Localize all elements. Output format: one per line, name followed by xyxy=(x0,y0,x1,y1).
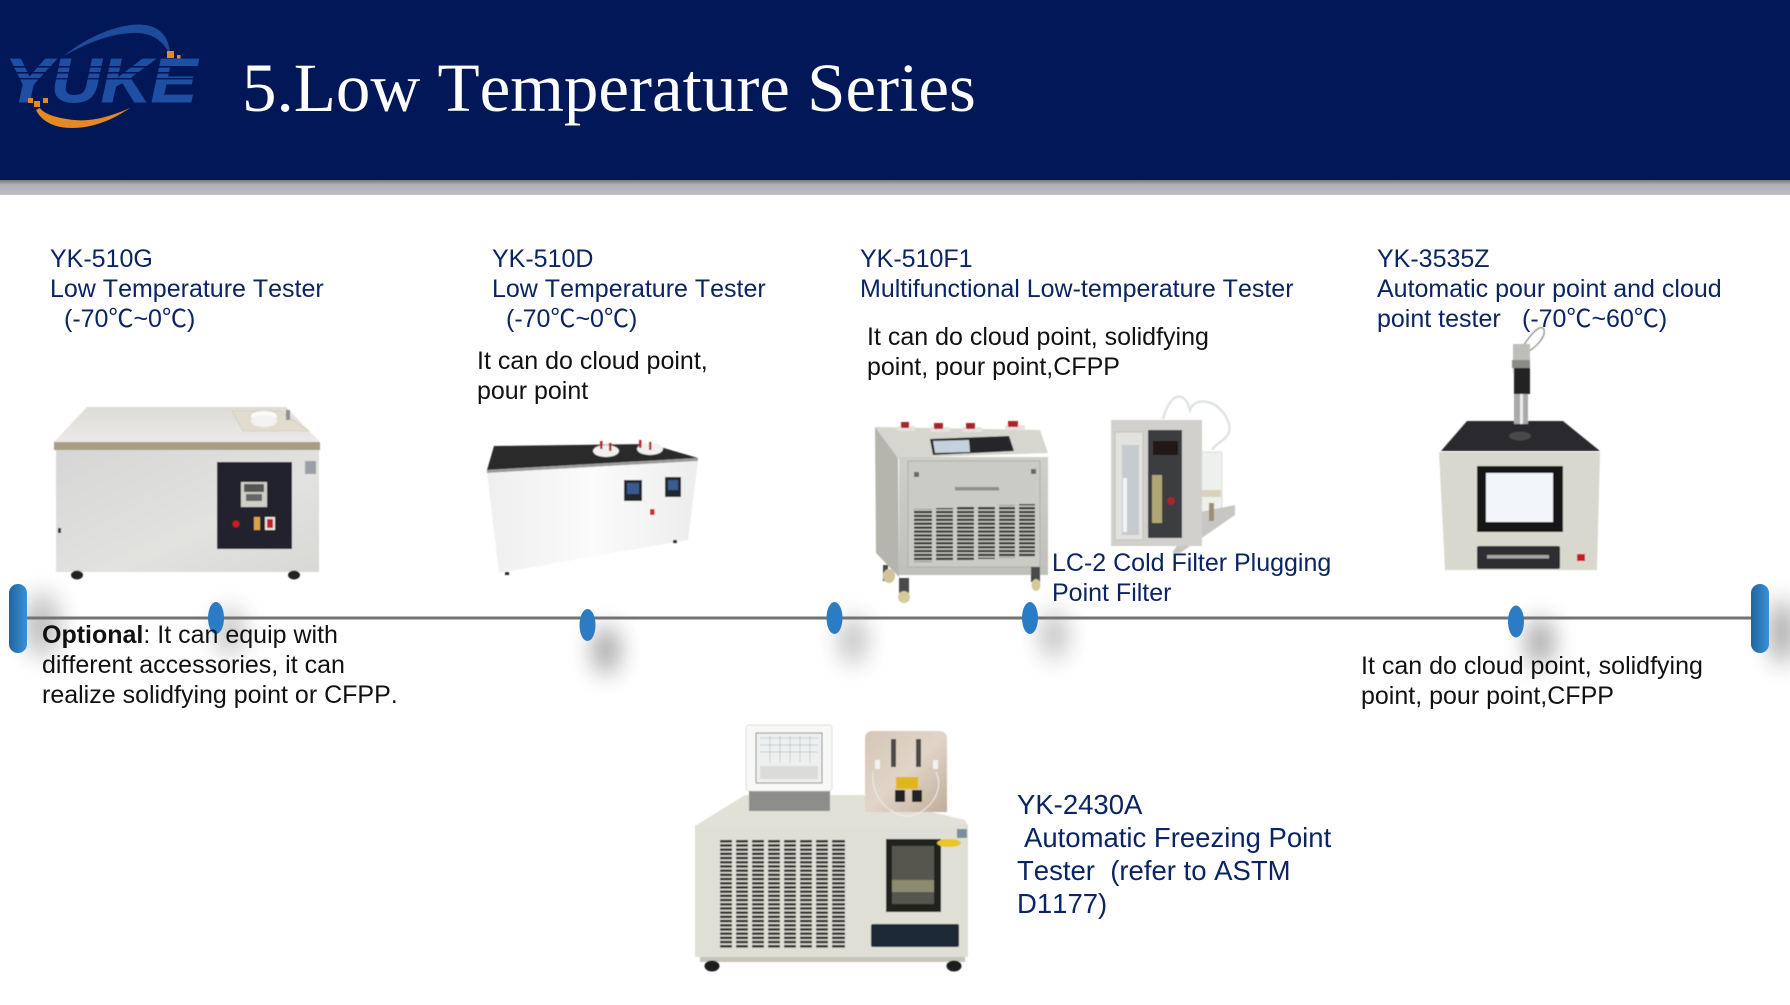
timeline node 1 xyxy=(208,602,224,634)
label: LC-2: LC-2 Cold Filter Plugging xyxy=(1052,549,1331,577)
heading: YK-2430A: YK-2430A xyxy=(1017,789,1143,820)
heading: YK-510F1: YK-510F1 xyxy=(860,245,973,273)
timeline xyxy=(9,584,1790,674)
heading: YK-2430A: Tester (refer to ASTM xyxy=(1017,855,1291,886)
heading: YK-3535Z: Automatic pour point and cloud xyxy=(1377,275,1722,303)
description: YK-510F1: It can do cloud point, solidfying xyxy=(867,323,1209,351)
timeline node 4 xyxy=(1022,602,1038,634)
heading: YK-510G: (-70℃~0℃) xyxy=(64,305,195,333)
description: YK-510D: It can do cloud point, xyxy=(477,347,708,375)
product: YK-510F1 xyxy=(875,421,1048,603)
description: YK-3535Z: It can do cloud point, solidfying xyxy=(1361,652,1703,680)
heading: YK-510D xyxy=(492,245,766,333)
timeline node 3 xyxy=(826,602,842,634)
heading: YK-3535Z: point tester xyxy=(1377,305,1501,333)
product: YK-3535Z xyxy=(1439,328,1600,570)
logo: YUKE: YUKE xyxy=(5,47,199,116)
description: optional accessories xyxy=(42,621,398,709)
title: 5.Low Temperature Series xyxy=(242,50,976,126)
heading: YK-510D: (-70℃~0℃) xyxy=(506,305,637,333)
description: YK-3535Z xyxy=(1361,652,1703,710)
timeline node 2 xyxy=(580,609,596,641)
description: YK-3535Z: point, pour point,CFPP xyxy=(1361,682,1614,710)
heading: YK-510F1 xyxy=(860,245,1294,303)
heading: YK-510G: YK-510G xyxy=(50,245,153,273)
heading: YK-2430A: D1177) xyxy=(1017,888,1107,919)
product: YK-2430A xyxy=(695,725,968,972)
timeline node 5 xyxy=(1508,606,1524,638)
product: YK-510G xyxy=(54,407,320,580)
heading: YK-3535Z: YK-3535Z xyxy=(1377,245,1490,273)
product: YK-510D xyxy=(487,440,698,575)
heading: YK-510D: YK-510D xyxy=(492,245,593,273)
heading: YK-510G: Low Temperature Tester xyxy=(50,275,324,303)
header banner xyxy=(0,0,1790,195)
description: YK-510F1: point, pour point,CFPP xyxy=(867,353,1120,381)
description: YK-510F1 xyxy=(867,323,1209,381)
heading: YK-510G xyxy=(50,245,324,333)
description: optional accessories: different accessories, it can xyxy=(42,651,345,679)
product: LC-2 filter xyxy=(1111,397,1235,553)
heading: YK-2430A: Automatic Freezing Point xyxy=(1024,822,1332,853)
heading: YK-510F1: Multifunctional Low-temperature Tester xyxy=(860,275,1294,303)
heading: YK-510D: Low Temperature Tester xyxy=(492,275,766,303)
description: YK-510D: pour point xyxy=(477,377,588,405)
logo: YUKE xyxy=(5,25,200,128)
description: optional accessories: realize solidfying point or CFPP. xyxy=(42,681,398,709)
label: LC-2 xyxy=(1052,549,1331,607)
timeline right end cap xyxy=(1751,584,1769,653)
heading: YK-2430A xyxy=(1017,789,1332,919)
description: YK-510D xyxy=(477,347,708,405)
heading: YK-3535Z xyxy=(1377,245,1722,333)
label: LC-2: Point Filter xyxy=(1052,579,1171,607)
timeline left end cap xyxy=(9,584,27,653)
heading: YK-3535Z: (-70℃~60℃) xyxy=(1522,305,1667,333)
description: optional accessories: Optional: It can equip with xyxy=(42,621,338,649)
